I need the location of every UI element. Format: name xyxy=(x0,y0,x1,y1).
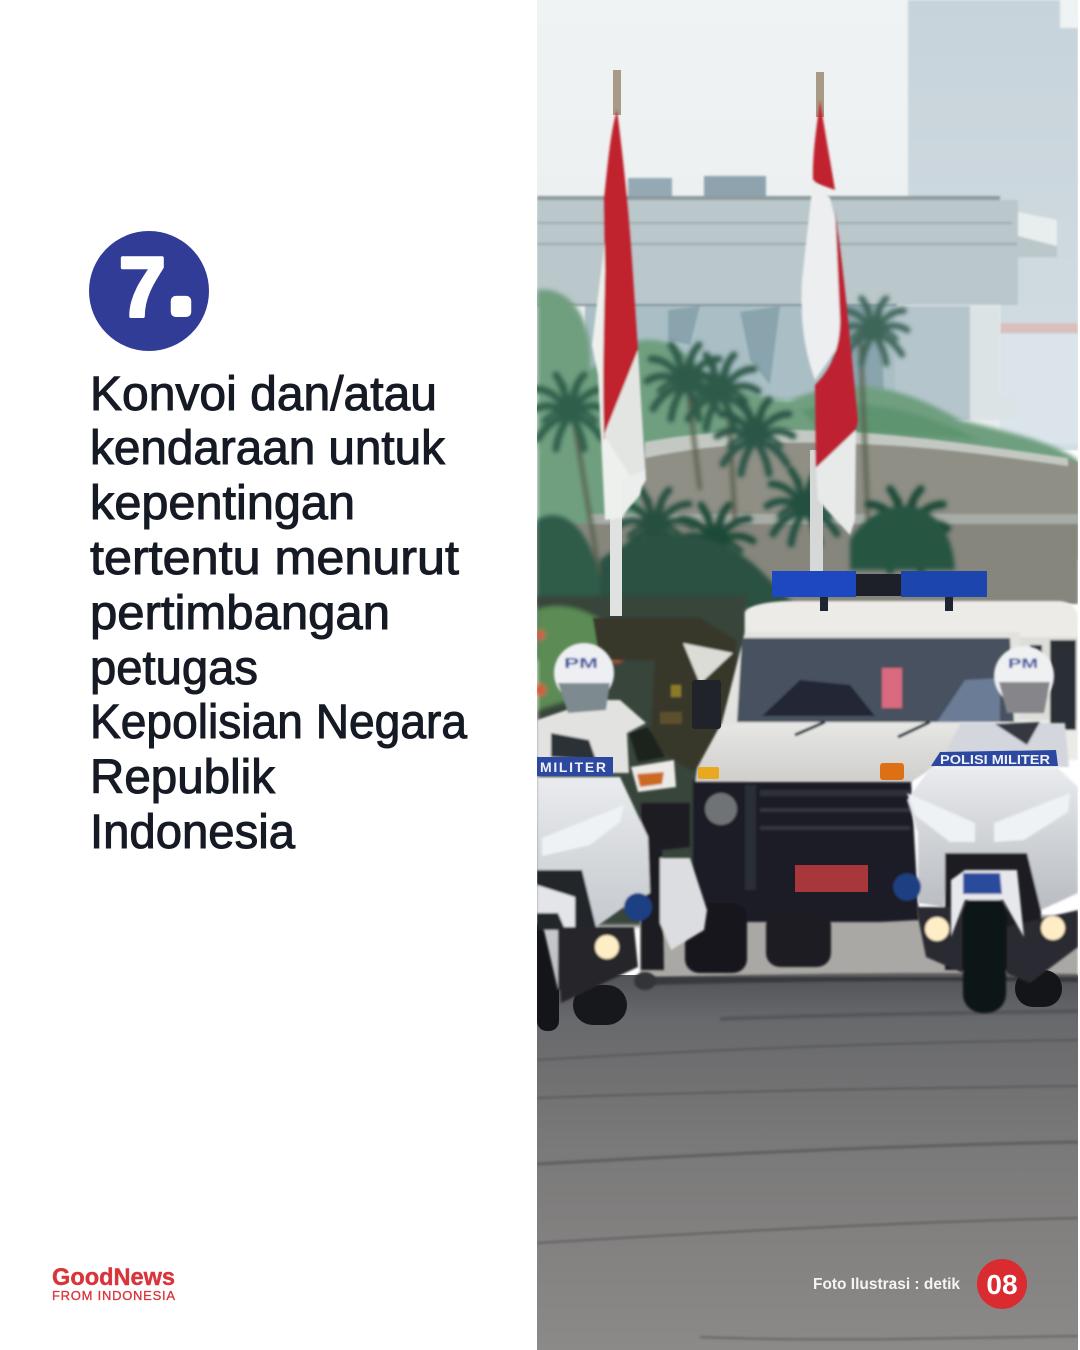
logo: GoodNews from Indonesia: FROM INDONESIA xyxy=(52,1288,175,1303)
heading text block: kendaraan untuk xyxy=(90,422,446,475)
rider xyxy=(537,643,665,773)
heading text block: Kepolisian Negara xyxy=(90,696,467,749)
rider xyxy=(937,646,1069,767)
banner: Polisi Militer: POLISI MILITER xyxy=(940,752,1051,767)
concrete terrace wall xyxy=(537,430,1078,604)
fairing xyxy=(537,760,707,1003)
number badge: 7 xyxy=(89,231,209,351)
road markings xyxy=(537,977,1078,1339)
flagpoles xyxy=(610,70,824,616)
photo: police convoy with flags xyxy=(532,0,1078,1350)
banner: Militer left: MILITER xyxy=(540,759,606,775)
heading text block: petugas xyxy=(90,642,258,695)
sky xyxy=(537,0,1078,450)
left motorcycle and rider xyxy=(537,643,707,1031)
heading text block: tertentu menurut xyxy=(90,532,459,585)
palms and shrubs xyxy=(532,298,955,660)
photo credit: Foto Ilustrasi : detik xyxy=(813,1276,960,1293)
blue light bar xyxy=(772,571,987,611)
indicator lamps xyxy=(698,767,719,779)
heading text block: Republik xyxy=(90,751,276,804)
heading text block xyxy=(90,368,467,859)
number plate xyxy=(795,865,868,892)
fairing xyxy=(893,768,1078,983)
shrubs and dark backdrop behind vehicles xyxy=(534,596,747,926)
wheels xyxy=(1015,970,1062,1007)
heading text block: kepentingan xyxy=(90,477,355,530)
rider: PM xyxy=(564,655,598,672)
trees behind the wall xyxy=(537,290,1078,560)
front wheel and fork xyxy=(951,870,1024,1013)
wheels xyxy=(573,985,627,1025)
number badge: 7: . xyxy=(171,245,191,328)
distant tower xyxy=(908,0,1078,450)
banner: Polisi Militer xyxy=(931,750,1058,767)
jeep body lower xyxy=(685,780,919,973)
page number badge xyxy=(977,1259,1027,1309)
flag right xyxy=(802,100,858,535)
flag left xyxy=(592,110,646,520)
heading text block: Indonesia xyxy=(90,806,295,859)
number badge: 7: 7 xyxy=(119,240,166,334)
hood and cab xyxy=(695,601,1078,782)
page number badge: 08 xyxy=(986,1269,1018,1300)
road surface xyxy=(537,975,1078,1350)
police jeep xyxy=(685,571,1078,973)
side mirror xyxy=(692,680,721,729)
heading text block: Konvoi dan/atau xyxy=(90,368,437,421)
rider: PM xyxy=(1008,655,1038,671)
heading text block: pertimbangan xyxy=(90,587,390,640)
right motorcycle and rider xyxy=(893,646,1078,1013)
government building xyxy=(537,176,1057,420)
armoured vehicle behind xyxy=(593,618,736,770)
logo: GoodNews from Indonesia: GoodNews xyxy=(52,1264,175,1291)
logo: GoodNews from Indonesia xyxy=(52,1264,175,1303)
